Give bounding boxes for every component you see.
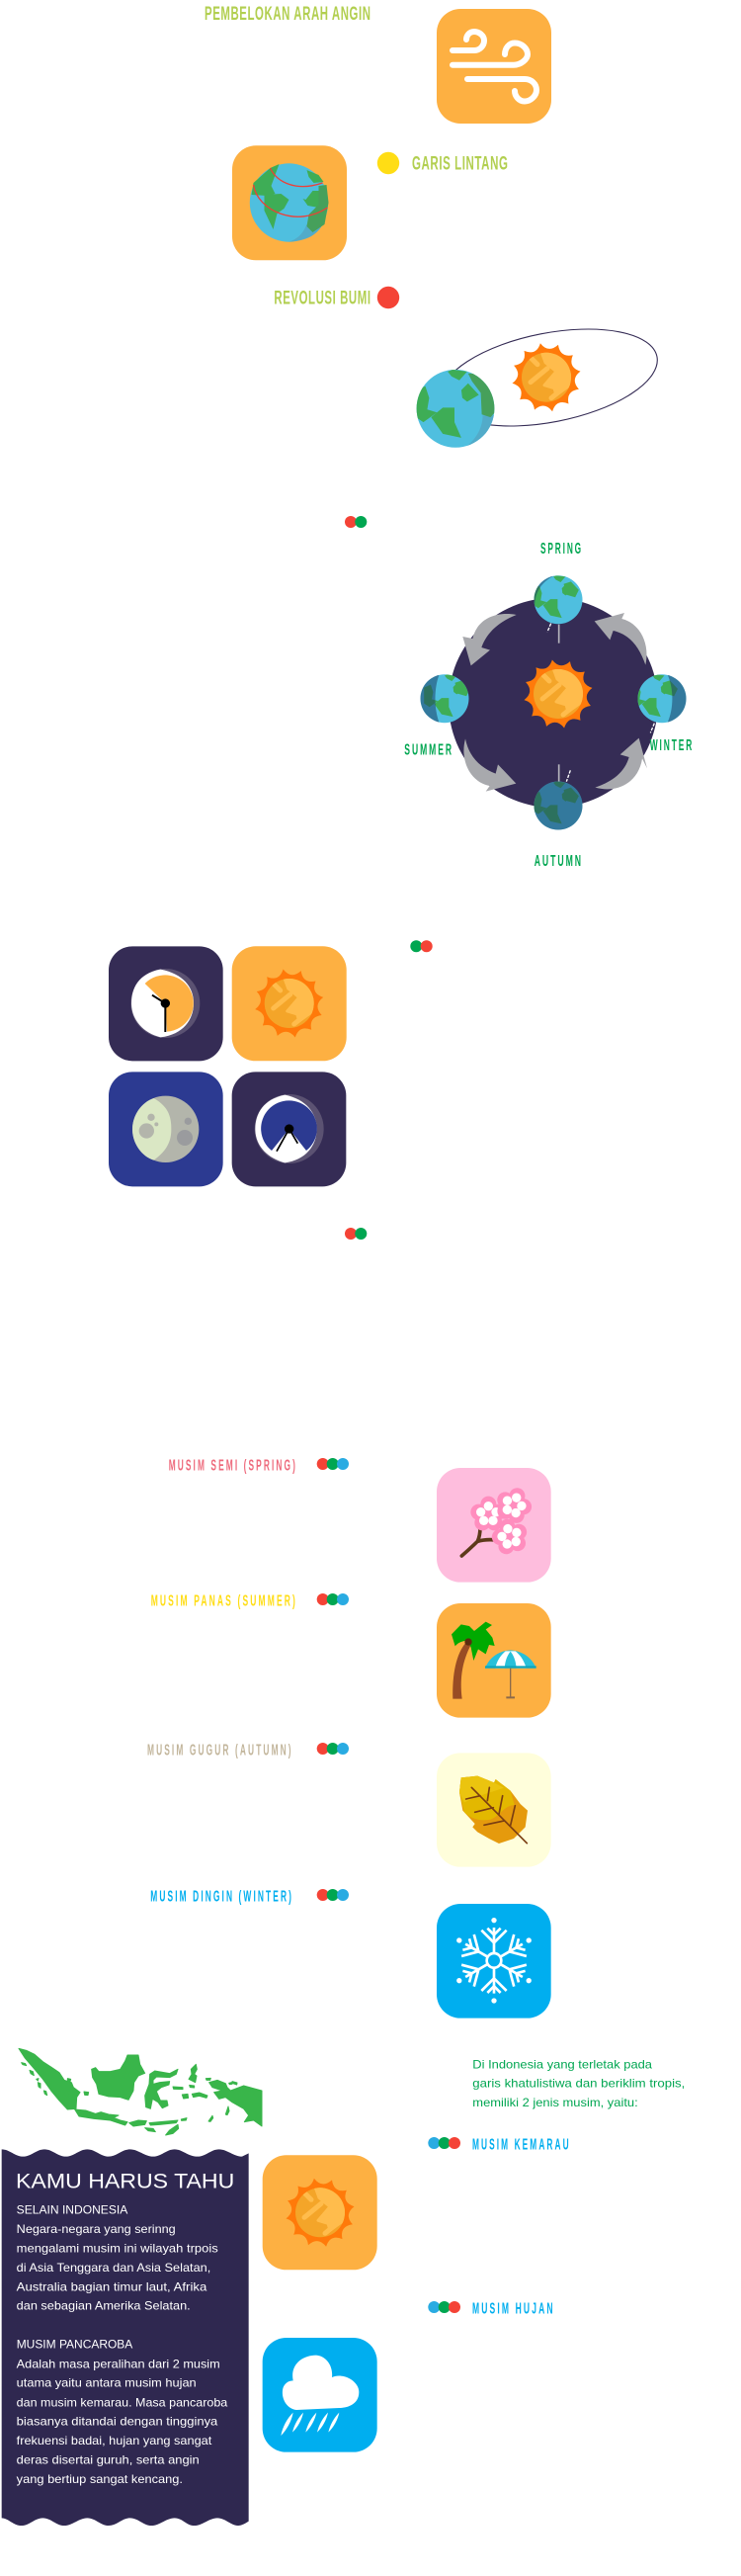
bullet dots: winter: [317, 1889, 349, 1901]
text block: musim pancaroba: Adalah masa peralihan dari 2 musim: [17, 2357, 220, 2370]
icon: cherry blossom: [437, 1468, 551, 1583]
bullet dots: kemarau: [428, 2137, 460, 2149]
bullet dots: seasons list intro: [345, 1228, 367, 1240]
bullet dots: summer: [317, 1593, 349, 1605]
label: autumn: AUTUMN: [535, 853, 583, 870]
icon: rain cloud: [263, 2338, 377, 2452]
arrow: top left: [462, 614, 517, 665]
arrow: bottom right: [595, 738, 647, 789]
text block: musim pancaroba: frekuensi badai, hujan yang sangat: [17, 2434, 212, 2447]
icon: globe with latitude lines: [232, 145, 347, 260]
text block: indonesia intro: memiliki 2 jenis musim, yaitu:: [472, 2096, 638, 2109]
icon: night clock: [232, 1072, 346, 1186]
text block: indonesia intro: garis khatulistiwa dan beriklim tropis,: [472, 2077, 685, 2091]
text block: selain indonesia: mengalami musim ini wilayah trpois: [17, 2241, 218, 2255]
text block: musim pancaroba: biasanya ditandai dengan tingginya: [17, 2414, 218, 2428]
bullet dots: seasons: [345, 516, 367, 528]
text block: selain indonesia: dan sebagian Amerika Selatan.: [17, 2299, 191, 2313]
icon: earth winter: [638, 674, 686, 724]
icon: afternoon clock: [109, 946, 223, 1061]
heading: pembelokan arah angin: PEMBELOKAN ARAH ANGIN: [205, 3, 371, 25]
arrow: bottom left: [463, 738, 516, 792]
icon: earth autumn: [534, 781, 583, 830]
text block: musim pancaroba: yang bertiup sangat kencang.: [17, 2472, 183, 2486]
text block: selain indonesia: SELAIN INDONESIA: [17, 2202, 127, 2216]
icon: earth summer: [421, 674, 468, 724]
bullet dots: spring: [317, 1458, 349, 1470]
dot: revolusi bumi: [377, 287, 399, 308]
diagram: earth orbiting the sun: [415, 313, 666, 450]
icon: leaf: [437, 1753, 551, 1867]
text block: musim pancaroba: dan musim kemarau. Masa pancaroba: [17, 2395, 228, 2409]
text block: musim pancaroba: [17, 2338, 228, 2486]
bullet dots: autumn: [317, 1743, 349, 1755]
icon: snowflake: [437, 1904, 551, 2018]
heading: musim gugur: MUSIM GUGUR (AUTUMN): [147, 1743, 293, 1760]
label: spring: SPRING: [540, 541, 583, 558]
text block: selain indonesia: di Asia Tenggara dan Asia Selatan,: [17, 2261, 210, 2275]
text block: musim pancaroba: utama yaitu antara musim hujan: [17, 2376, 197, 2390]
panel: kamu harus tahu: [2, 2149, 249, 2526]
icon: palm and umbrella: [437, 1603, 551, 1718]
icon: earth spring: [533, 575, 583, 624]
text block: indonesia intro: Di Indonesia yang terletak pada: [472, 2057, 652, 2071]
text block: selain indonesia: Negara-negara yang serinng: [17, 2222, 176, 2236]
arrow: top right: [595, 613, 646, 665]
heading: musim dingin: MUSIM DINGIN (WINTER): [150, 1888, 293, 1905]
dot: garis lintang: [377, 152, 399, 174]
panel title: KAMU HARUS TAHU: [16, 2170, 234, 2192]
text block: selain indonesia: Australia bagian timur laut, Afrika: [17, 2279, 207, 2293]
icon: sun centre: [524, 660, 593, 728]
icon: wind: [437, 9, 551, 124]
icon: sun tile: [232, 946, 347, 1061]
heading: garis lintang: GARIS LINTANG: [412, 153, 508, 175]
text block: musim pancaroba: MUSIM PANCAROBA: [17, 2338, 132, 2352]
bullet dots: day and night: [410, 940, 433, 952]
icon: moon tile: [109, 1072, 223, 1186]
heading: revolusi bumi: REVOLUSI BUMI: [274, 287, 371, 308]
text block: indonesia intro: [472, 2057, 685, 2109]
label: summer: SUMMER: [404, 741, 453, 758]
label: winter: WINTER: [650, 737, 694, 754]
icon: sun tile dry season: [263, 2155, 377, 2270]
bullet dots: hujan: [428, 2301, 460, 2313]
map: indonesia: [19, 2048, 262, 2135]
text block: musim pancaroba: deras disertai guruh, serta angin: [17, 2453, 200, 2467]
heading: musim hujan: MUSIM HUJAN: [472, 2301, 555, 2318]
text block: selain indonesia: [17, 2202, 218, 2313]
heading: musim semi: MUSIM SEMI (SPRING): [169, 1458, 297, 1475]
heading: musim kemarau: MUSIM KEMARAU: [472, 2137, 571, 2154]
heading: musim panas: MUSIM PANAS (SUMMER): [151, 1593, 297, 1610]
diagram: four seasons: [404, 541, 694, 870]
